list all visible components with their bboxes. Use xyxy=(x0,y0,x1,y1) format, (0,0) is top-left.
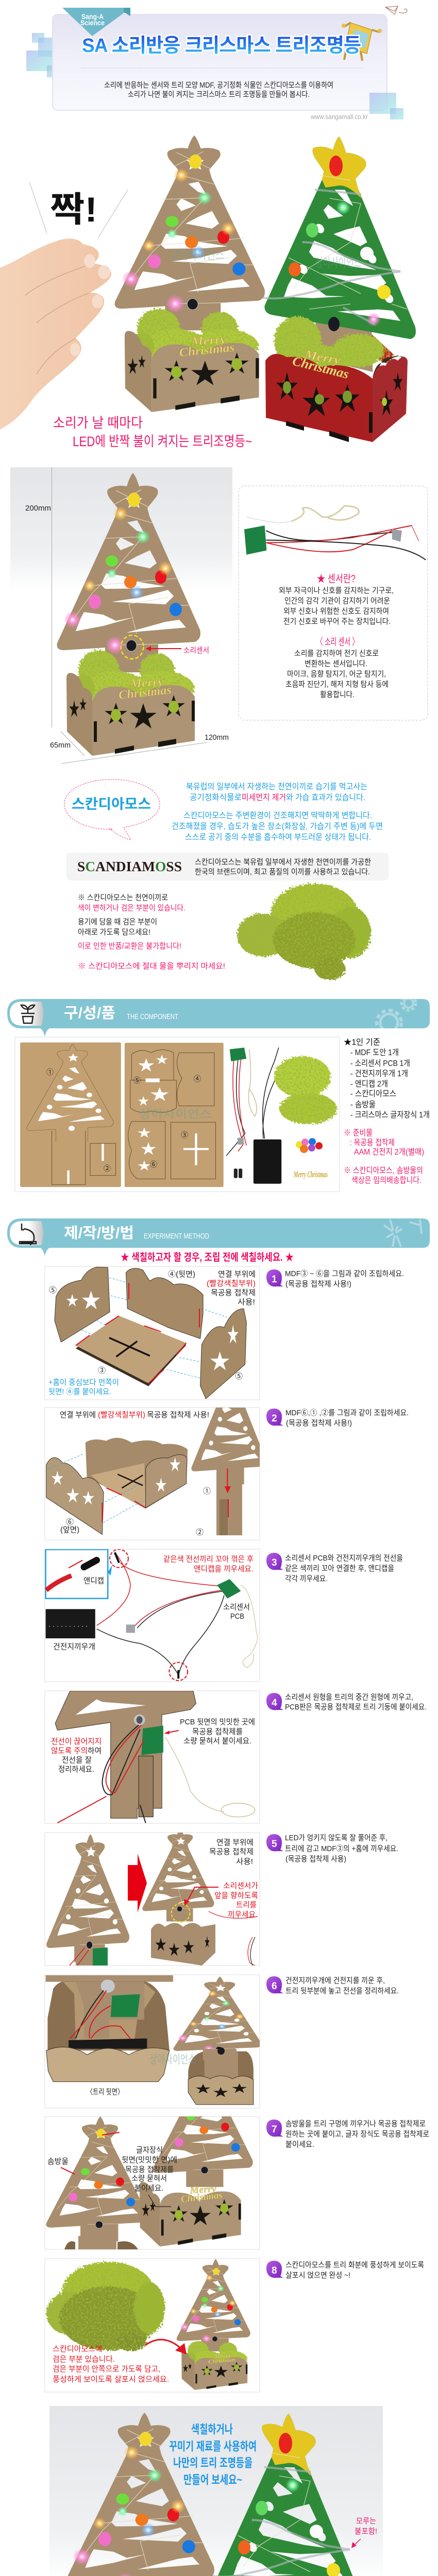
step 5 labels: 사용! xyxy=(236,1857,253,1866)
board part numbers: ⑥ xyxy=(150,1160,157,1168)
moss notes xyxy=(78,893,225,971)
photo: box parts exploded xyxy=(55,1267,246,1399)
step 7 badge and text: 솜방울을 트리 구멍에 끼우거나 목공용 접착제로 xyxy=(285,2120,426,2128)
board part numbers: ④ xyxy=(194,1075,201,1083)
step 1 badge and text: 1 xyxy=(272,1274,277,1285)
step 1 labels: 사용! xyxy=(238,1298,255,1307)
step 2 badge and text xyxy=(266,1409,409,1428)
kit contents list: - 솜방울 xyxy=(350,1100,376,1109)
ribbon: Sang-A Science: Science xyxy=(80,19,105,27)
kit contents list: - MDF 도안 1개 xyxy=(350,1048,399,1057)
callout: tinsel not included xyxy=(351,2517,377,2548)
text: make your own lamp: 꾸미기 재료를 사용하여 xyxy=(169,2439,257,2453)
step 2 labels: ② xyxy=(196,1528,204,1537)
moss description: 와 가습 효과가 있습니다. xyxy=(286,793,365,802)
step 7 arrows xyxy=(61,2132,171,2207)
kit contents list: ※ 준비물 xyxy=(344,1128,373,1138)
speech bubble: 스칸디아모스 xyxy=(72,796,151,812)
heading: 제/작/방/법 xyxy=(64,1225,134,1242)
watermarks xyxy=(171,248,362,270)
watermarks: 상아사이언스 xyxy=(171,248,224,262)
text: sensor definition xyxy=(279,586,394,626)
step 8 badge and text: 8 xyxy=(272,2265,277,2276)
kit contents list: 색상은 임의배송합니다. xyxy=(351,1176,422,1185)
moss description: 스스로 공기 중의 수분을 흡수하여 부드러운 상태가 됩니다. xyxy=(185,833,371,842)
text: sound sensor: 변환하는 센서입니다. xyxy=(305,659,367,668)
icon: big red arrow xyxy=(128,1854,147,1912)
step 7 labels: 붙이세요. xyxy=(134,2184,163,2193)
decorative translucent squares xyxy=(26,33,62,77)
banner panel xyxy=(53,14,387,110)
clap text: 짝! xyxy=(50,190,97,229)
kit contents list: - 소리센서 PCB 1개 xyxy=(350,1059,410,1068)
step 4 labels xyxy=(51,1718,255,1774)
photo: wrap LEDs, insert tree xyxy=(46,1828,258,1965)
website: www.sangamall.co.kr xyxy=(310,113,368,121)
finished product photo xyxy=(49,2394,383,2576)
dimensions photo xyxy=(10,467,232,764)
finished green tree xyxy=(208,2394,367,2576)
board part numbers: ③ xyxy=(181,1131,188,1139)
step 6 label and watermark: 상아사이언스 xyxy=(149,2053,196,2066)
step 5 badge and text: 트리에 감고 MDF③의 +홈에 끼우세요. xyxy=(285,1844,398,1853)
step 7 labels: 글자장식 xyxy=(136,2146,163,2155)
step 4 labels: 전선을 잘 xyxy=(62,1756,92,1765)
step 4 badge and text: 소리센서 원형을 트리의 중간 원형에 끼우고, xyxy=(285,1693,413,1702)
painted green tree with red pot xyxy=(259,117,417,442)
icon: microscope xyxy=(20,1224,36,1245)
step 1 labels: +홈이 중심보다 먼쪽이 xyxy=(48,1378,119,1387)
callout: tinsel not included: 모루는 xyxy=(356,2517,376,2526)
step 4 labels: PCB 뒷면의 밋밋한 곳에 xyxy=(180,1718,255,1726)
step 3 xyxy=(45,1549,260,1682)
text: sensor definition: 전기 신호로 바꾸어 주는 장치입니다. xyxy=(283,617,391,626)
step 8 badge and text: 살포시 얹으면 완성 ~! xyxy=(285,2271,350,2280)
kit contents list: AAM 건전지 2개(별매) xyxy=(354,1147,424,1157)
step 2 badge and text: (목공용 접착제 사용!) xyxy=(286,1419,352,1428)
step 2 xyxy=(44,1408,260,1540)
step 6 badge and text: 트리 뒷부분에 놓고 전선을 정리하세요. xyxy=(285,1987,399,1995)
photo: rear view xyxy=(46,1975,261,2105)
step 5 labels: 연결 부위에 xyxy=(216,1838,254,1847)
caption xyxy=(53,415,252,449)
step 3 badge and text: 소리센서 PCB와 건전지끼우개의 전선을 xyxy=(285,1554,403,1563)
step 5 labels: 트리를 xyxy=(236,1901,257,1909)
moss notes: 이로 인한 반품/교환은 불가합니다! xyxy=(78,942,181,951)
step 3 labels xyxy=(53,1555,254,1651)
step 1 labels: (빨강색칠부위) xyxy=(207,1279,256,1288)
step 1 labels: ⑤ xyxy=(49,1286,57,1295)
step 4 labels: 소량 묻혀서 붙이세요. xyxy=(183,1737,251,1745)
step 8 labels: 검은 부분 있습니다. xyxy=(53,2355,115,2364)
moss xyxy=(274,1056,337,1124)
step 8 labels: 검은 부분이 안쪽으로 가도록 담고, xyxy=(53,2365,160,2374)
kit contents list: - 건전지끼우개 1개 xyxy=(350,1069,408,1078)
decorative squares right xyxy=(369,93,403,120)
step 1 xyxy=(45,1266,260,1400)
moss notes: 색이 변하거나 검은 부분이 있습니다. xyxy=(78,904,186,912)
kit contents list: ※ 스칸디아모스, 솜방울의 xyxy=(344,1166,423,1175)
intro text xyxy=(104,81,333,99)
text: sound sensor: 초음파 진단기, 해저 지형 탐사 등에 xyxy=(285,680,389,689)
photo: PCB on trunk xyxy=(55,1691,255,1823)
kit contents list: - 크리스마스 글자장식 1개 xyxy=(350,1110,430,1120)
photo: kit components xyxy=(15,1037,340,1192)
kit contents list: - 앤디캡 2개 xyxy=(350,1079,388,1089)
step 5 labels: 소리센서가 xyxy=(223,1882,258,1890)
heading: 구/성/품 xyxy=(64,1005,115,1022)
intro text: 소리가 나면 불이 켜지는 크리스마스 트리 조명등을 만들어 봅시다. xyxy=(128,90,310,99)
caption: LED에 반짝 불이 켜지는 트리조명등~ xyxy=(73,434,252,449)
dimension labels xyxy=(25,504,229,750)
step 8 labels: 스칸디아모스에 xyxy=(53,2345,103,2353)
step 1 badge and text: MDF③ ~ ⑥을 그림과 같이 조립하세요. xyxy=(285,1269,404,1278)
step 1 badge and text xyxy=(266,1269,404,1289)
dimension labels: 65mm xyxy=(50,741,71,750)
step 4 badge and text: PCB판은 목공용 접착제로 트리 기둥에 붙이세요. xyxy=(285,1703,427,1711)
step 5 labels: 목공용 접착제 xyxy=(209,1848,254,1856)
dimension labels: 200mm xyxy=(25,504,51,513)
MDF boards xyxy=(20,1042,224,1187)
step 2 labels: ⑥ xyxy=(66,1518,74,1527)
section header: components: THE COMPONENT xyxy=(127,1012,178,1021)
moss description xyxy=(172,782,383,842)
step 4 labels: 않도록 주의 xyxy=(51,1747,88,1755)
step 1 badge and text: (목공용 접착제 사용!) xyxy=(285,1280,351,1289)
step 7 labels: 뒷면(밋밋한 면)에 xyxy=(122,2156,177,2164)
photo: moss xyxy=(237,884,371,980)
icon: potted plant xyxy=(21,1005,35,1023)
photo: decorated trees xyxy=(46,2116,253,2249)
step 8 labels: 풍성하게 보이도록 살포시 얹으세요. xyxy=(53,2375,169,2384)
board part numbers: ② xyxy=(104,1164,111,1173)
icon: robot mascot xyxy=(342,23,382,61)
step 3 labels: 건전지끼우개 xyxy=(53,1642,95,1651)
step 4 labels: 하여 xyxy=(88,1747,102,1755)
header: product title banner xyxy=(26,6,407,121)
step 2 badge and text: MDF⑥,① ,②를 그림과 같이 조립하세요. xyxy=(285,1409,409,1417)
kit contents list: ★1인 기준 xyxy=(344,1038,380,1047)
step 8 labels xyxy=(53,2345,169,2384)
gold letters: Merry Christmas xyxy=(293,1170,328,1179)
moss notes: 용기에 담을 때 검은 부분이 xyxy=(78,918,157,926)
step 1 labels: 뒷면! ④를 붙이세요. xyxy=(48,1387,111,1396)
kit contents list: : 목공용 접착제 xyxy=(350,1138,395,1147)
moss notes: ※ 스칸디아모스는 천연이끼로 xyxy=(78,893,168,902)
text: sound sensor xyxy=(285,649,389,699)
moss description: 미세먼지 제거 xyxy=(242,793,286,802)
photo: wiring xyxy=(46,1549,258,1681)
panel: what is a sensor xyxy=(239,486,428,720)
clap lines xyxy=(29,182,128,238)
text: make your own lamp: 색칠하거나 xyxy=(191,2422,233,2436)
icon: gears xyxy=(377,996,416,1035)
pom-poms xyxy=(296,1138,323,1153)
step 1 labels: ⑤ xyxy=(235,1372,243,1381)
brand box xyxy=(66,853,389,880)
kit contents list xyxy=(344,1038,430,1185)
step 3 labels: 같은색 전선끼리 꼬아 꺾은 후 xyxy=(163,1555,254,1564)
step 4 labels: 목공용 접착제를 xyxy=(192,1727,243,1736)
step 2 labels: 연결 부위에 xyxy=(60,1411,96,1419)
step 3 labels: 앤디캡 xyxy=(83,1577,104,1585)
moss description: 건조해졌을 경우, 습도가 높은 장소(화장실, 가습기 주변 등)에 두면 xyxy=(172,822,383,831)
section header: method xyxy=(7,1218,430,1256)
sensor callout: 소리센서 xyxy=(183,646,209,655)
step 4 labels: 전선이 끊어지지 xyxy=(51,1737,102,1746)
dimension labels: 120mm xyxy=(205,733,229,742)
moss description: 스칸디아모스는 주변환경이 건조해지면 딱딱하게 변합니다. xyxy=(183,811,372,820)
step 4 xyxy=(45,1691,260,1823)
text: make your own lamp: 나만의 트리 조명등을 xyxy=(173,2456,252,2469)
text: sensor definition: 인간의 감각 기관이 감지하기 어려운 xyxy=(284,597,390,605)
section header: components xyxy=(7,996,430,1037)
step 2 labels: (빨강색칠부위) xyxy=(98,1411,145,1419)
icon: rays xyxy=(384,1219,422,1247)
text: sound sensor: 소리를 감지하여 전기 신호로 xyxy=(294,649,379,658)
caption: 소리가 날 때마다 xyxy=(53,415,143,431)
note: painting: ★ 색칠하고자 할 경우, 조립 전에 색칠하세요. ★ xyxy=(121,1251,294,1263)
text: sensor definition: 외부 자극이나 신호를 감지하는 기구로, xyxy=(279,586,394,595)
step 2 labels xyxy=(60,1411,211,1537)
step 1 labels: 연결 부위에 xyxy=(218,1270,256,1279)
heading: sound sensor: 〈 소리 센서 〉 xyxy=(316,636,359,648)
step 3 badge and text: 각각 끼우세요. xyxy=(285,1574,328,1583)
step 6 label and watermark xyxy=(87,2053,196,2096)
step 1 labels: 목공용 접착제 xyxy=(211,1289,256,1297)
step 6 badge and text: 6 xyxy=(272,1981,277,1992)
step 7 labels: 솜방울 xyxy=(47,2157,69,2166)
step 3 labels: PCB xyxy=(230,1612,244,1621)
section header: method: EXPERIMENT METHOD xyxy=(144,1232,209,1241)
step 3 badge and text xyxy=(266,1553,403,1583)
kit contents list: - 스칸디아모스 xyxy=(350,1089,396,1098)
text: make your own lamp xyxy=(169,2422,257,2486)
heading: sensor: ★ 센서란? xyxy=(317,573,356,585)
step 6 label and watermark: 〈트리 뒷면〉 xyxy=(87,2088,124,2096)
brand box: 한국의 브랜드이며, 최고 품질의 이끼를 사용하고 있습니다. xyxy=(195,868,370,876)
photo: sensor PCB and wires xyxy=(244,506,426,560)
step 1 labels: ③ xyxy=(98,1366,106,1375)
brown tree xyxy=(115,135,265,412)
step 6 badge and text: 건전지끼우개에 건전지를 끼운 후, xyxy=(285,1976,385,1985)
moss notes: ※ 스칸디아모스에 절대 물을 뿌리지 마세요! xyxy=(78,962,225,971)
step 4 labels: 정리하세요. xyxy=(58,1765,94,1774)
step 3 badge and text: 3 xyxy=(272,1557,277,1568)
wires and PCB xyxy=(226,1047,284,1184)
step 8 badge and text xyxy=(266,2261,424,2280)
photo: assembled box and tree xyxy=(46,1408,260,1535)
step 1 labels xyxy=(48,1270,256,1396)
step 5 labels: 앞을 향하도록 xyxy=(214,1891,258,1900)
step 7 badge and text: 7 xyxy=(272,2124,277,2135)
step 5 badge and text: 5 xyxy=(272,1839,277,1850)
step 4 badge and text xyxy=(266,1693,427,1711)
step 2 badge and text: 2 xyxy=(272,1413,277,1424)
dimension lines xyxy=(52,467,207,764)
step 8 badge and text: 스칸디아모스를 트리 화분에 풍성하게 보이도록 xyxy=(285,2261,424,2269)
text: sensor definition: 외부 신호나 위험한 신호도 감지하여 xyxy=(283,607,389,616)
callout: tinsel not included: 불포함! xyxy=(355,2527,377,2536)
step 7 xyxy=(44,2116,260,2249)
board part numbers: ① xyxy=(46,1068,54,1076)
icon: paper plane xyxy=(385,6,407,14)
moss description: 공기정화식물로 xyxy=(190,793,242,802)
title: SA 소리반응 크리스마스 트리조명등 xyxy=(82,35,361,57)
brand box: 스칸디아모스는 북유럽 일부에서 자생한 천연이끼를 가공한 xyxy=(195,858,371,867)
step 3 labels: 앤디캡을 끼우세요. xyxy=(194,1565,254,1573)
step 5 badge and text: (목공용 접착제 사용) xyxy=(285,1855,346,1863)
intro text: 소리에 반응하는 센서와 트리 모양 MDF, 공기정화 식물인 스칸디아모스를 이용하여 xyxy=(104,81,333,90)
watermark: 상아사이언스 xyxy=(139,1108,211,1121)
step 2 labels: (앞면) xyxy=(60,1526,79,1534)
icon: hand xyxy=(0,239,111,429)
tree cutout xyxy=(27,1044,113,1141)
step 8 xyxy=(45,2259,260,2392)
step 5 labels xyxy=(209,1838,258,1919)
step 7 badge and text: 붙이세요. xyxy=(285,2140,314,2149)
dimension tree xyxy=(57,473,200,756)
step 6 xyxy=(45,1975,261,2108)
step 7 labels: 소량 묻혀서 xyxy=(131,2174,167,2183)
photo: moss and finished tree xyxy=(46,2259,250,2390)
step 2 labels: ① xyxy=(203,1487,211,1496)
step 1 labels: ④(뒷면) xyxy=(168,1270,195,1279)
step 3 badge and text: 같은 색끼리 꼬아 연결한 후, 앤디캡을 xyxy=(285,1564,394,1573)
section: scandia moss xyxy=(64,779,389,980)
step 5 labels: 끼우세요. xyxy=(228,1910,258,1919)
board part numbers: ⑤ xyxy=(133,1076,141,1084)
speech bubble xyxy=(64,779,160,840)
step 7 badge and text xyxy=(266,2120,429,2149)
text: make your own lamp: 만들어 보세요~ xyxy=(183,2473,242,2486)
moss description: 북유럽의 일부에서 자생하는 천연이끼로 습기를 먹고사는 xyxy=(186,782,367,791)
moss notes: 아래로 가도록 담으세요! xyxy=(78,928,150,937)
step 5 xyxy=(45,1828,260,1965)
text: sound sensor: 마이크, 음향 탐지기, 어군 탐지기, xyxy=(287,670,386,679)
board part numbers xyxy=(46,1068,201,1173)
sensor callout xyxy=(121,635,209,659)
hero: hand clap and trees xyxy=(0,117,417,449)
ribbon: Sang-A Science: Sang-A xyxy=(81,12,104,21)
text: sound sensor: 활용합니다. xyxy=(320,690,355,699)
watermarks: 상아사이언스 xyxy=(315,256,362,270)
ribbon: Sang-A Science xyxy=(62,8,130,36)
step 2 labels: 목공용 접착제 사용! xyxy=(147,1411,209,1419)
finished brown tree xyxy=(66,2413,214,2576)
brand box: SCANDIAMOSS xyxy=(77,859,182,874)
step 5 badge and text xyxy=(266,1834,398,1863)
step 4 badge and text: 4 xyxy=(272,1698,277,1708)
step 7 labels xyxy=(47,2146,177,2193)
step 3 labels: 소리센서 xyxy=(223,1603,250,1612)
step 7 labels: 목공용 접착제를 xyxy=(125,2165,174,2174)
step 5 badge and text: LED가 엉키지 않도록 잘 풀어준 후, xyxy=(285,1834,388,1842)
step 6 badge and text xyxy=(266,1976,399,1995)
